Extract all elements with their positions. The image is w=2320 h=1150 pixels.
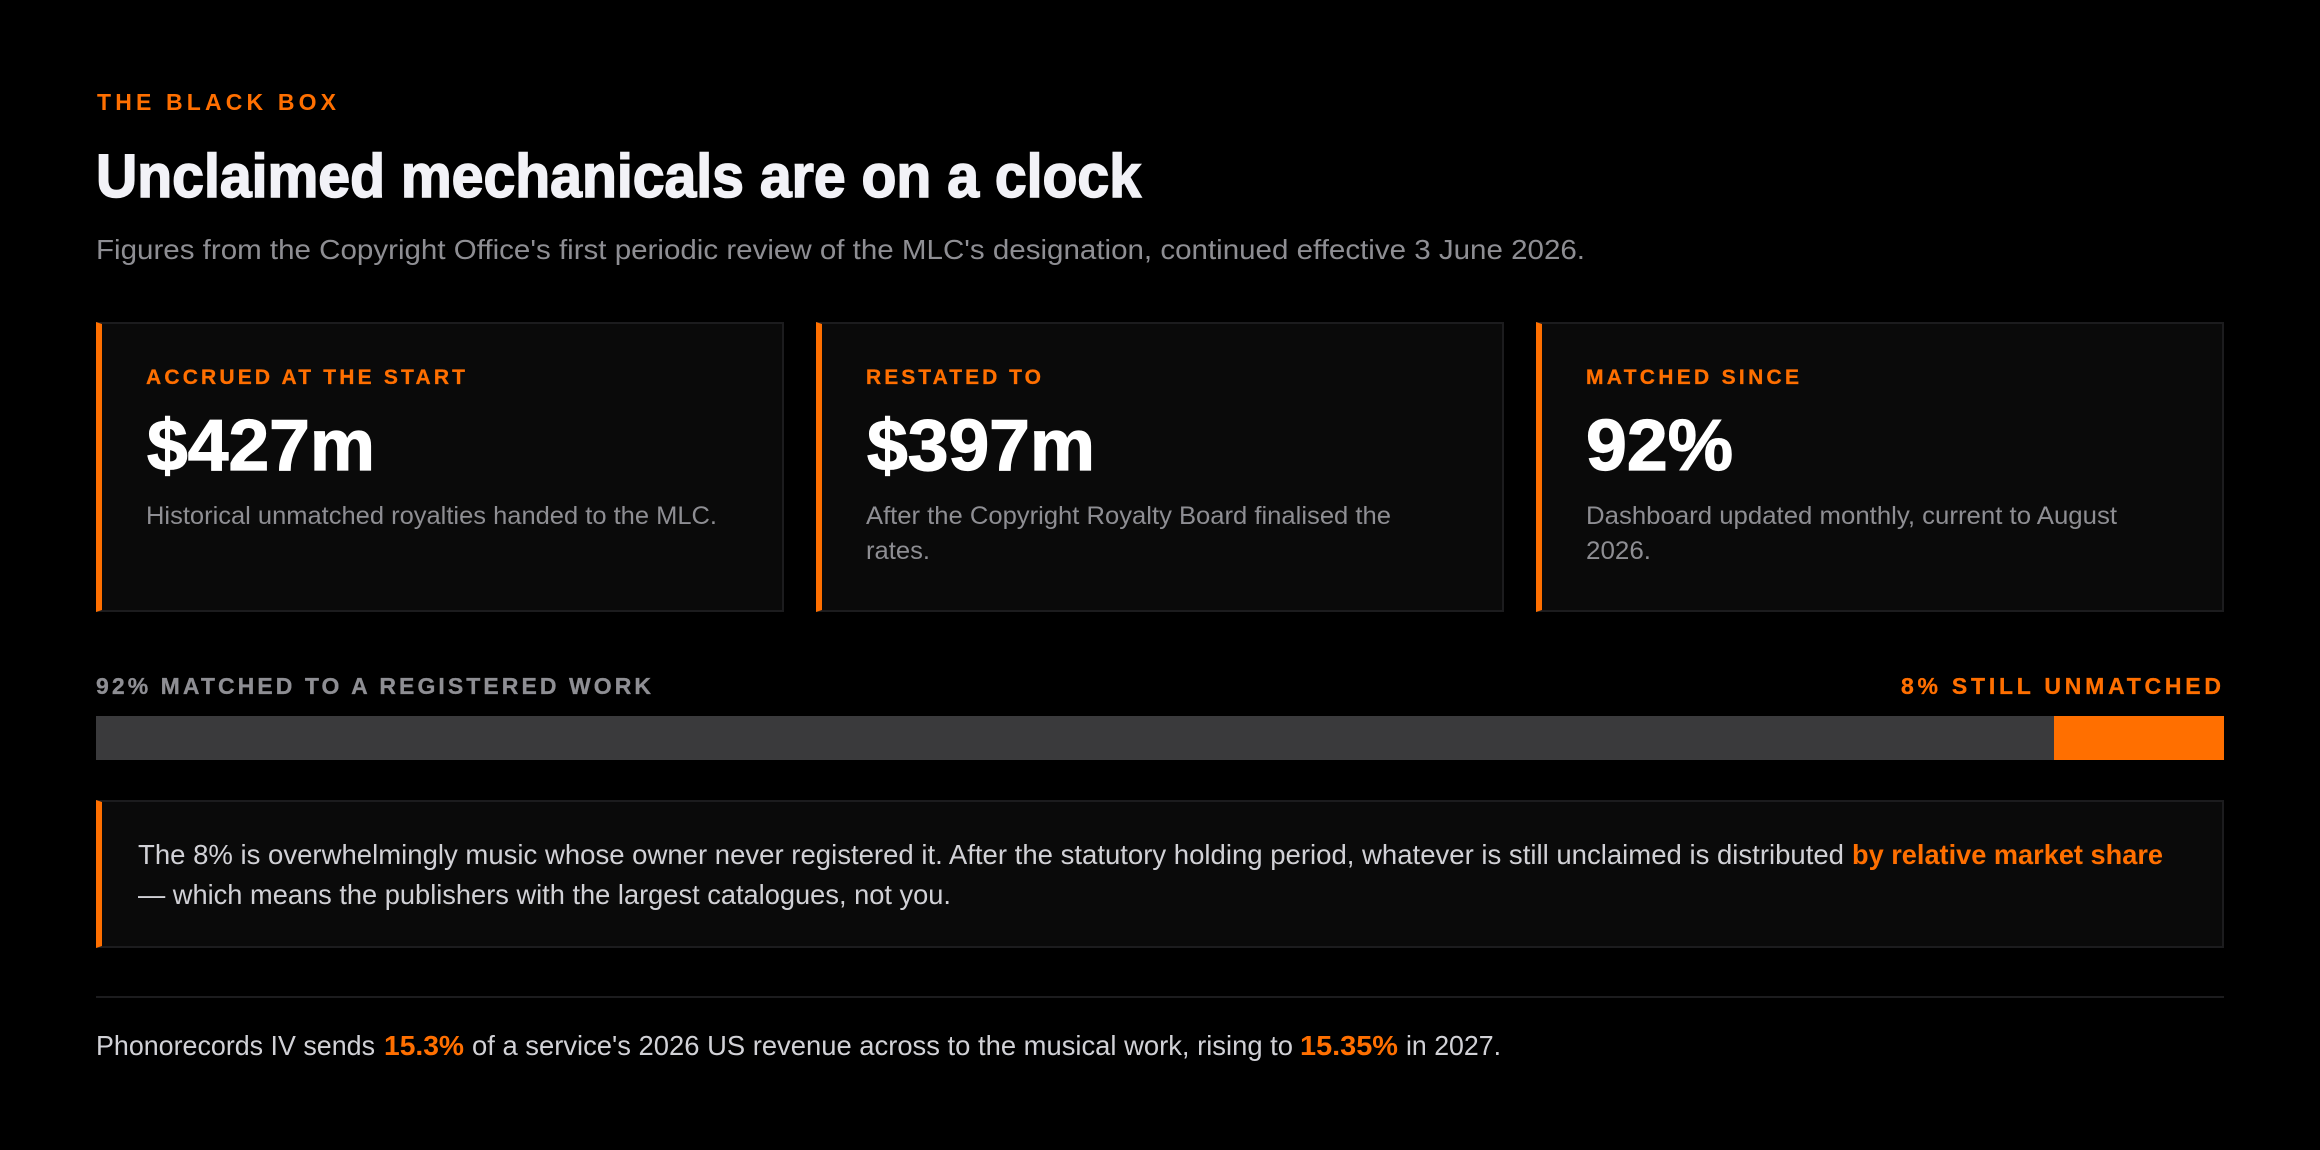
- callout: relative market share: The 8% is overwhelmingly music whose owner never registered it. After the statutory holding period, whatever is still unclaimed is distributed: [138, 839, 1844, 870]
- callout: relative market share: — which means the publishers with the largest catalogues, not you.: [138, 879, 951, 910]
- footnote: phonorecords iv rates: [96, 1030, 1501, 1061]
- footnote: phonorecords iv rates: 15.3%: [384, 1030, 464, 1061]
- description: after the copyright royalty board: After the Copyright Royalty Board finalised the: [866, 502, 1391, 530]
- title: Unclaimed mechanicals are on a clock: [96, 142, 1141, 210]
- panel: restated to: [816, 322, 1504, 612]
- bar label: 8% still unmatched: 8% STILL UNMATCHED: [1901, 673, 2221, 699]
- label: matched since: MATCHED SINCE: [1586, 366, 1799, 389]
- description: dashboard updated monthly: Dashboard updated monthly, current to August: [1586, 502, 2117, 530]
- panel: matched since: [1536, 322, 2224, 612]
- description: historical unmatched royalties: Historical unmatched royalties handed to the MLC.: [146, 502, 717, 530]
- footnote: phonorecords iv rates: of a service's 2026 US revenue across to the musical work, rising to: [472, 1030, 1293, 1061]
- description: dashboard updated monthly: 2026.: [1586, 537, 1651, 565]
- footnote: phonorecords iv rates: Phonorecords IV sends: [96, 1030, 375, 1061]
- callout: relative market share: [96, 800, 2224, 948]
- progress bar: 92% matched, 8% unmatched: [96, 716, 2224, 760]
- footnote: phonorecords iv rates: in 2027.: [1406, 1030, 1501, 1061]
- eyebrow: the black box: THE BLACK BOX: [97, 89, 337, 115]
- callout: relative market share: by relative market share: [1852, 839, 2163, 870]
- stat: $427m: $427m: [147, 406, 375, 486]
- description: dashboard updated monthly: [1586, 502, 2117, 565]
- panel: accrued at the start: [96, 322, 784, 612]
- description: after the copyright royalty board: [866, 502, 1391, 565]
- footnote: phonorecords iv rates: 15.35%: [1300, 1030, 1398, 1061]
- stat: 92%: 92%: [1586, 406, 1733, 486]
- subtitle: Figures from the Copyright Office's first periodic review of the MLC's designation, continued effective 3 June 2026.: [96, 234, 1585, 265]
- stat: $397m: $397m: [867, 406, 1095, 486]
- description: after the copyright royalty board: rates.: [866, 537, 930, 565]
- bar label: 92% matched: 92% MATCHED TO A REGISTERED WORK: [96, 673, 651, 699]
- label: restated to: RESTATED TO: [866, 366, 1041, 389]
- label: accrued at the start: ACCRUED AT THE START: [146, 366, 465, 389]
